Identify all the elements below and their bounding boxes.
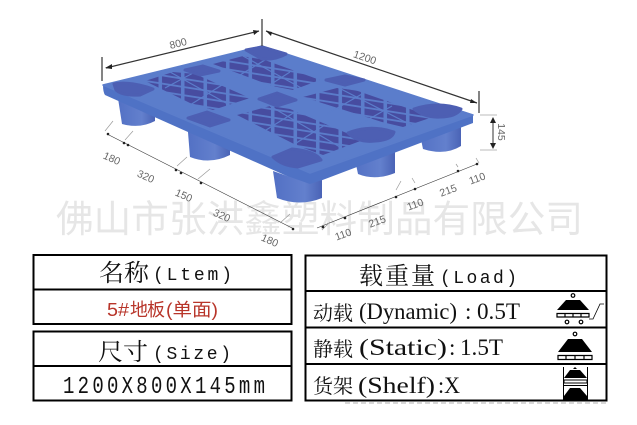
row: shelf [313, 373, 460, 398]
heading: size: 尺寸 [98, 339, 148, 368]
lattice diagonals [165, 56, 415, 150]
panel: size [33, 332, 292, 401]
dimension arrowheads [105, 30, 496, 230]
watermark: 佛山市张洪鑫塑料制品有限公司 [56, 198, 583, 240]
pallet top face [103, 46, 473, 173]
row: static: 1.5T [460, 335, 503, 360]
row: shelf: :X [438, 373, 460, 398]
heading: size [98, 339, 231, 368]
icon: static load [558, 332, 592, 360]
value: name: 地板 [130, 300, 165, 320]
panel: load [305, 256, 607, 400]
corner pockets [114, 47, 461, 167]
row: dynamic [313, 299, 520, 325]
dimension labels: 150 [173, 187, 194, 205]
row: dynamic: 动载 [313, 302, 353, 325]
row: static: 静载 [313, 338, 353, 361]
heading: size: (Size) [153, 345, 231, 365]
heading: load [359, 263, 517, 292]
back right foot [418, 125, 461, 152]
dimension labels: 320 [211, 207, 232, 225]
heading: load: 载重量 [359, 263, 435, 292]
dimension labels: 110 [405, 196, 425, 213]
pallet illustration [103, 46, 473, 202]
dimension labels: 180 [259, 232, 280, 250]
dimension labels: 110 [467, 170, 487, 187]
dimension labels: 180 [101, 150, 122, 168]
value: name [107, 300, 218, 320]
dimension labels: 320 [135, 168, 156, 186]
dimension labels: 215 [438, 182, 459, 200]
right middle foot [353, 150, 395, 177]
row: static [313, 335, 503, 361]
dimension labels: 145 [495, 123, 507, 141]
dimension labels [101, 36, 507, 250]
row: shelf: (Shelf) [358, 373, 435, 398]
row: dynamic: 0.5T [477, 299, 520, 324]
icon: shelf load [564, 367, 588, 400]
heading: name: (Ltem) [153, 266, 232, 286]
watermark noise under bottom border [345, 402, 606, 404]
left foot [117, 92, 155, 126]
heading: name [99, 260, 232, 289]
pallet side faces [103, 85, 473, 185]
dimension labels: 215 [367, 213, 388, 231]
dimension labels: 110 [333, 226, 353, 243]
lattice panels [145, 56, 433, 155]
row: static: (Static) [359, 335, 447, 360]
value: name: 5# [107, 300, 129, 320]
row: dynamic: (Dynamic) [359, 299, 457, 324]
row: dynamic: : [465, 299, 471, 324]
row: shelf: 货架 [313, 375, 353, 398]
value: size: 1200X800X145mm [63, 374, 265, 401]
heading: name: 名称 [99, 260, 150, 289]
panel: item name [33, 255, 292, 324]
dimension labels: 800 [168, 36, 188, 52]
dimension labels: 1200 [352, 48, 378, 67]
heading: load: (Load) [440, 269, 517, 289]
row: static: : [449, 335, 455, 360]
icon: dynamic load [557, 294, 604, 324]
middle front foot [187, 120, 230, 161]
value: name: (单面) [166, 300, 218, 320]
dimension lines [102, 19, 497, 230]
front foot [273, 171, 322, 202]
